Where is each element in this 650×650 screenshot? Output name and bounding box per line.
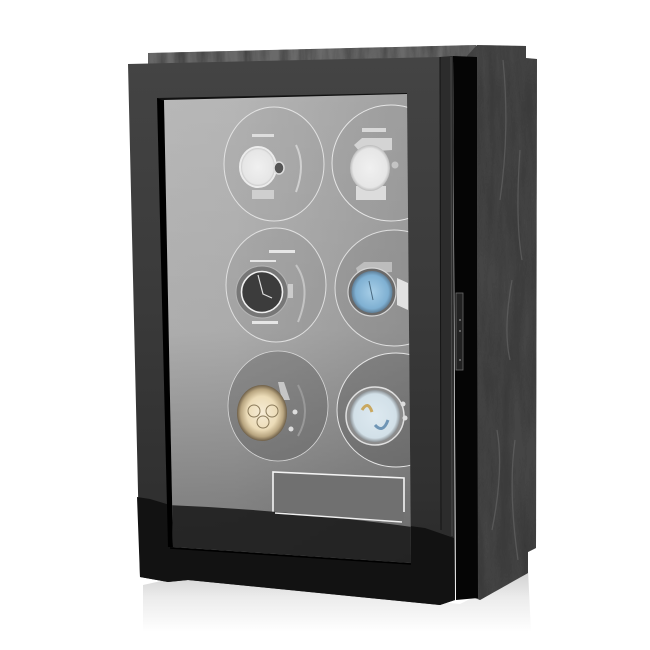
glass lower reflection bbox=[172, 505, 411, 563]
black strip between door and side bbox=[453, 56, 478, 600]
row 3 right: winder and light dial watch bbox=[336, 352, 410, 468]
side lock bbox=[456, 293, 463, 370]
door frame bbox=[128, 56, 455, 605]
frame edge bevel bbox=[440, 56, 454, 538]
display panel bottom edge bbox=[275, 513, 402, 522]
row 3 left: winder and gold dial watch bbox=[228, 351, 328, 461]
floor reflection bbox=[143, 570, 531, 632]
frame glossy lower reflection bbox=[137, 497, 455, 605]
inner black recess of window bbox=[157, 98, 175, 547]
row 1 right: winder and silver watch bbox=[332, 104, 408, 222]
cabinet top: wood bbox=[148, 45, 478, 64]
wood veins bbox=[492, 60, 522, 560]
cabinet side: wood bbox=[467, 45, 537, 600]
display panel bbox=[273, 472, 404, 522]
product photo: six-watch winder cabinet bbox=[128, 45, 537, 618]
glass bottom frame edge bbox=[170, 548, 411, 564]
row 1 left: winder and silver watch bbox=[224, 107, 324, 221]
glass window bbox=[164, 94, 411, 563]
row 2 right: winder and blue dial watch bbox=[334, 230, 410, 346]
row 2 left: winder and dark dial watch bbox=[226, 228, 326, 342]
